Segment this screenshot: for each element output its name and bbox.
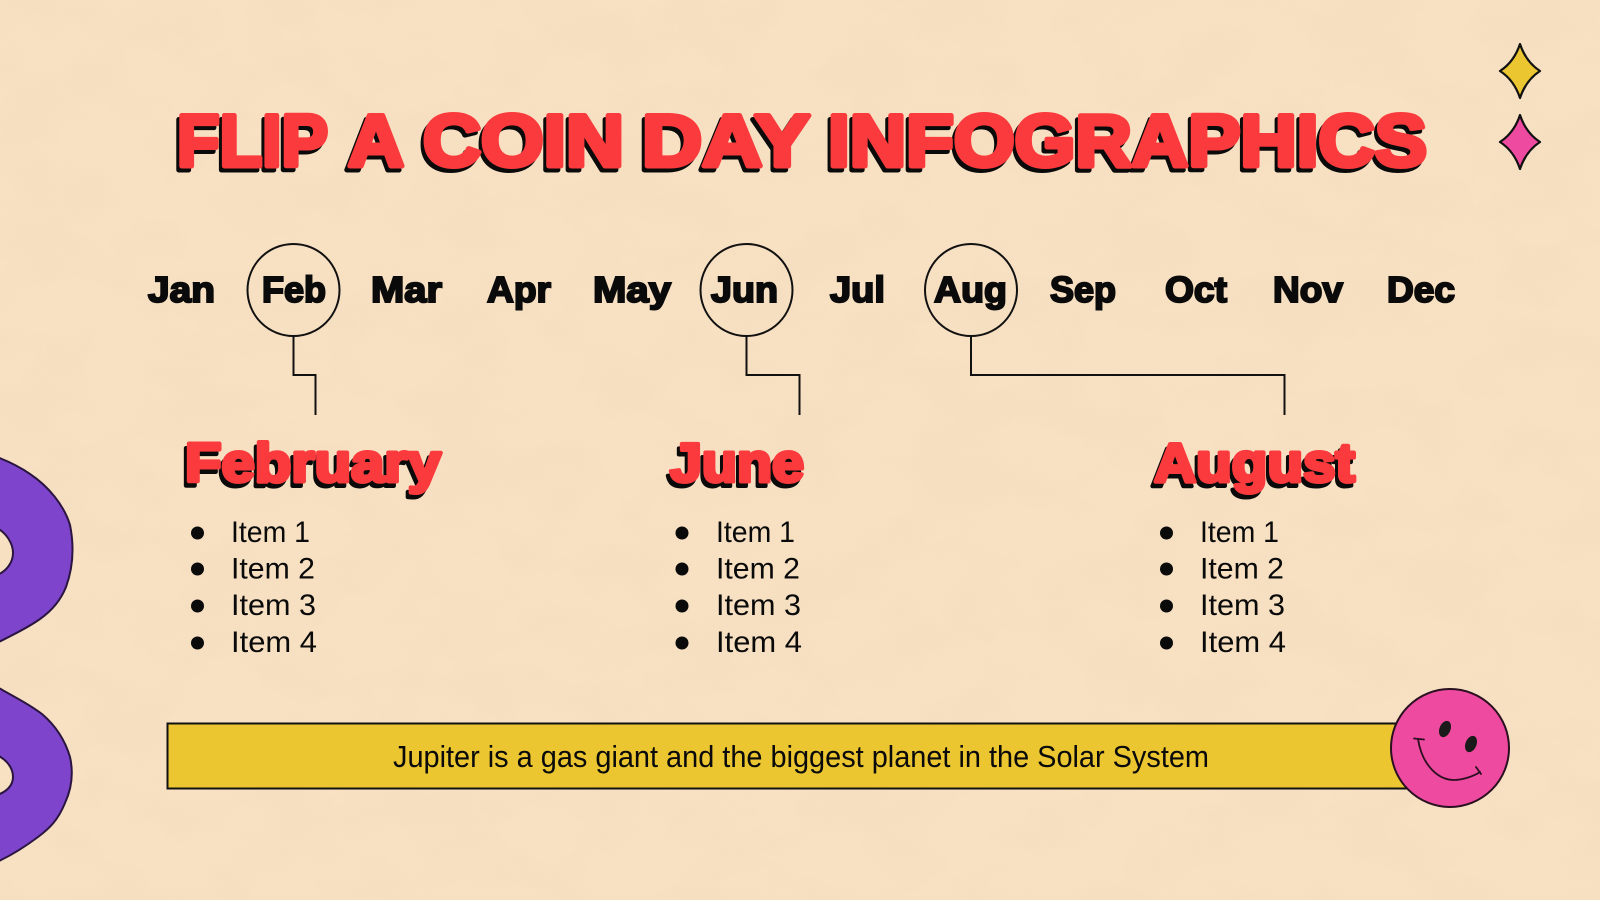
list: June items (676, 516, 802, 659)
month: Jan: Jan (148, 269, 215, 310)
title: INFOGRAPHICS (825, 105, 1424, 186)
month: Sep: Sep (1050, 269, 1116, 310)
month: Dec: Dec (1387, 269, 1455, 310)
list: June items: Item 4 (716, 626, 802, 659)
title: COIN (420, 105, 621, 186)
heading: June: June (670, 432, 804, 494)
callout banner (168, 724, 1428, 788)
heading: August: August (1154, 432, 1355, 494)
month: Nov: Nov (1273, 269, 1343, 310)
title: DAY (642, 101, 810, 182)
list: February items: Item 3 (231, 589, 316, 622)
list: June items: Item 2 (716, 552, 800, 586)
panel: June (667, 432, 804, 659)
panel: February (182, 432, 441, 659)
list: August items: Item 2 (1200, 552, 1284, 586)
title: A (345, 105, 401, 186)
heading: February: February (185, 432, 441, 494)
month: Feb: Feb (262, 269, 326, 310)
list: August items: Item 4 (1200, 626, 1286, 659)
title: FLIP (174, 105, 325, 186)
callout banner: Jupiter is a gas giant and the biggest planet in the Solar System (393, 739, 1209, 774)
list: August items: Item 3 (1200, 589, 1285, 622)
panel: August (1151, 432, 1355, 659)
list: February items: Item 4 (231, 626, 317, 659)
icon: yellow sparkle (1500, 44, 1540, 98)
title: A (348, 101, 404, 182)
list: February items: Item 1 (231, 516, 310, 549)
title: COIN (423, 101, 624, 182)
title (174, 101, 1427, 186)
title: INFOGRAPHICS (828, 101, 1427, 182)
title: DAY (639, 105, 807, 186)
circle and connector: February (248, 244, 340, 415)
icon: pink sparkle (1500, 115, 1540, 169)
list: June items: Item 1 (716, 516, 795, 549)
month: Aug: Aug (934, 269, 1007, 310)
decorative purple squiggle (0, 457, 73, 862)
list: February items: Item 2 (231, 552, 315, 586)
icon: smiley face (1391, 689, 1509, 807)
heading: June: June (667, 436, 801, 498)
title: FLIP (177, 101, 328, 182)
circle and connector: August (925, 244, 1284, 415)
circle and connector: June (700, 244, 800, 415)
heading: February: February (182, 436, 438, 498)
month: Mar: Mar (371, 269, 442, 310)
list: August items: Item 1 (1200, 516, 1279, 549)
heading: August: August (1151, 436, 1352, 498)
month: Apr: Apr (487, 269, 551, 310)
list: August items (1160, 516, 1286, 659)
month: Jul: Jul (830, 269, 885, 310)
month: Jun: Jun (711, 269, 778, 310)
month: Oct: Oct (1165, 269, 1227, 310)
month: May: May (593, 269, 671, 310)
month timeline (148, 269, 1455, 310)
list: June items: Item 3 (716, 589, 801, 622)
list: February items (191, 516, 317, 659)
